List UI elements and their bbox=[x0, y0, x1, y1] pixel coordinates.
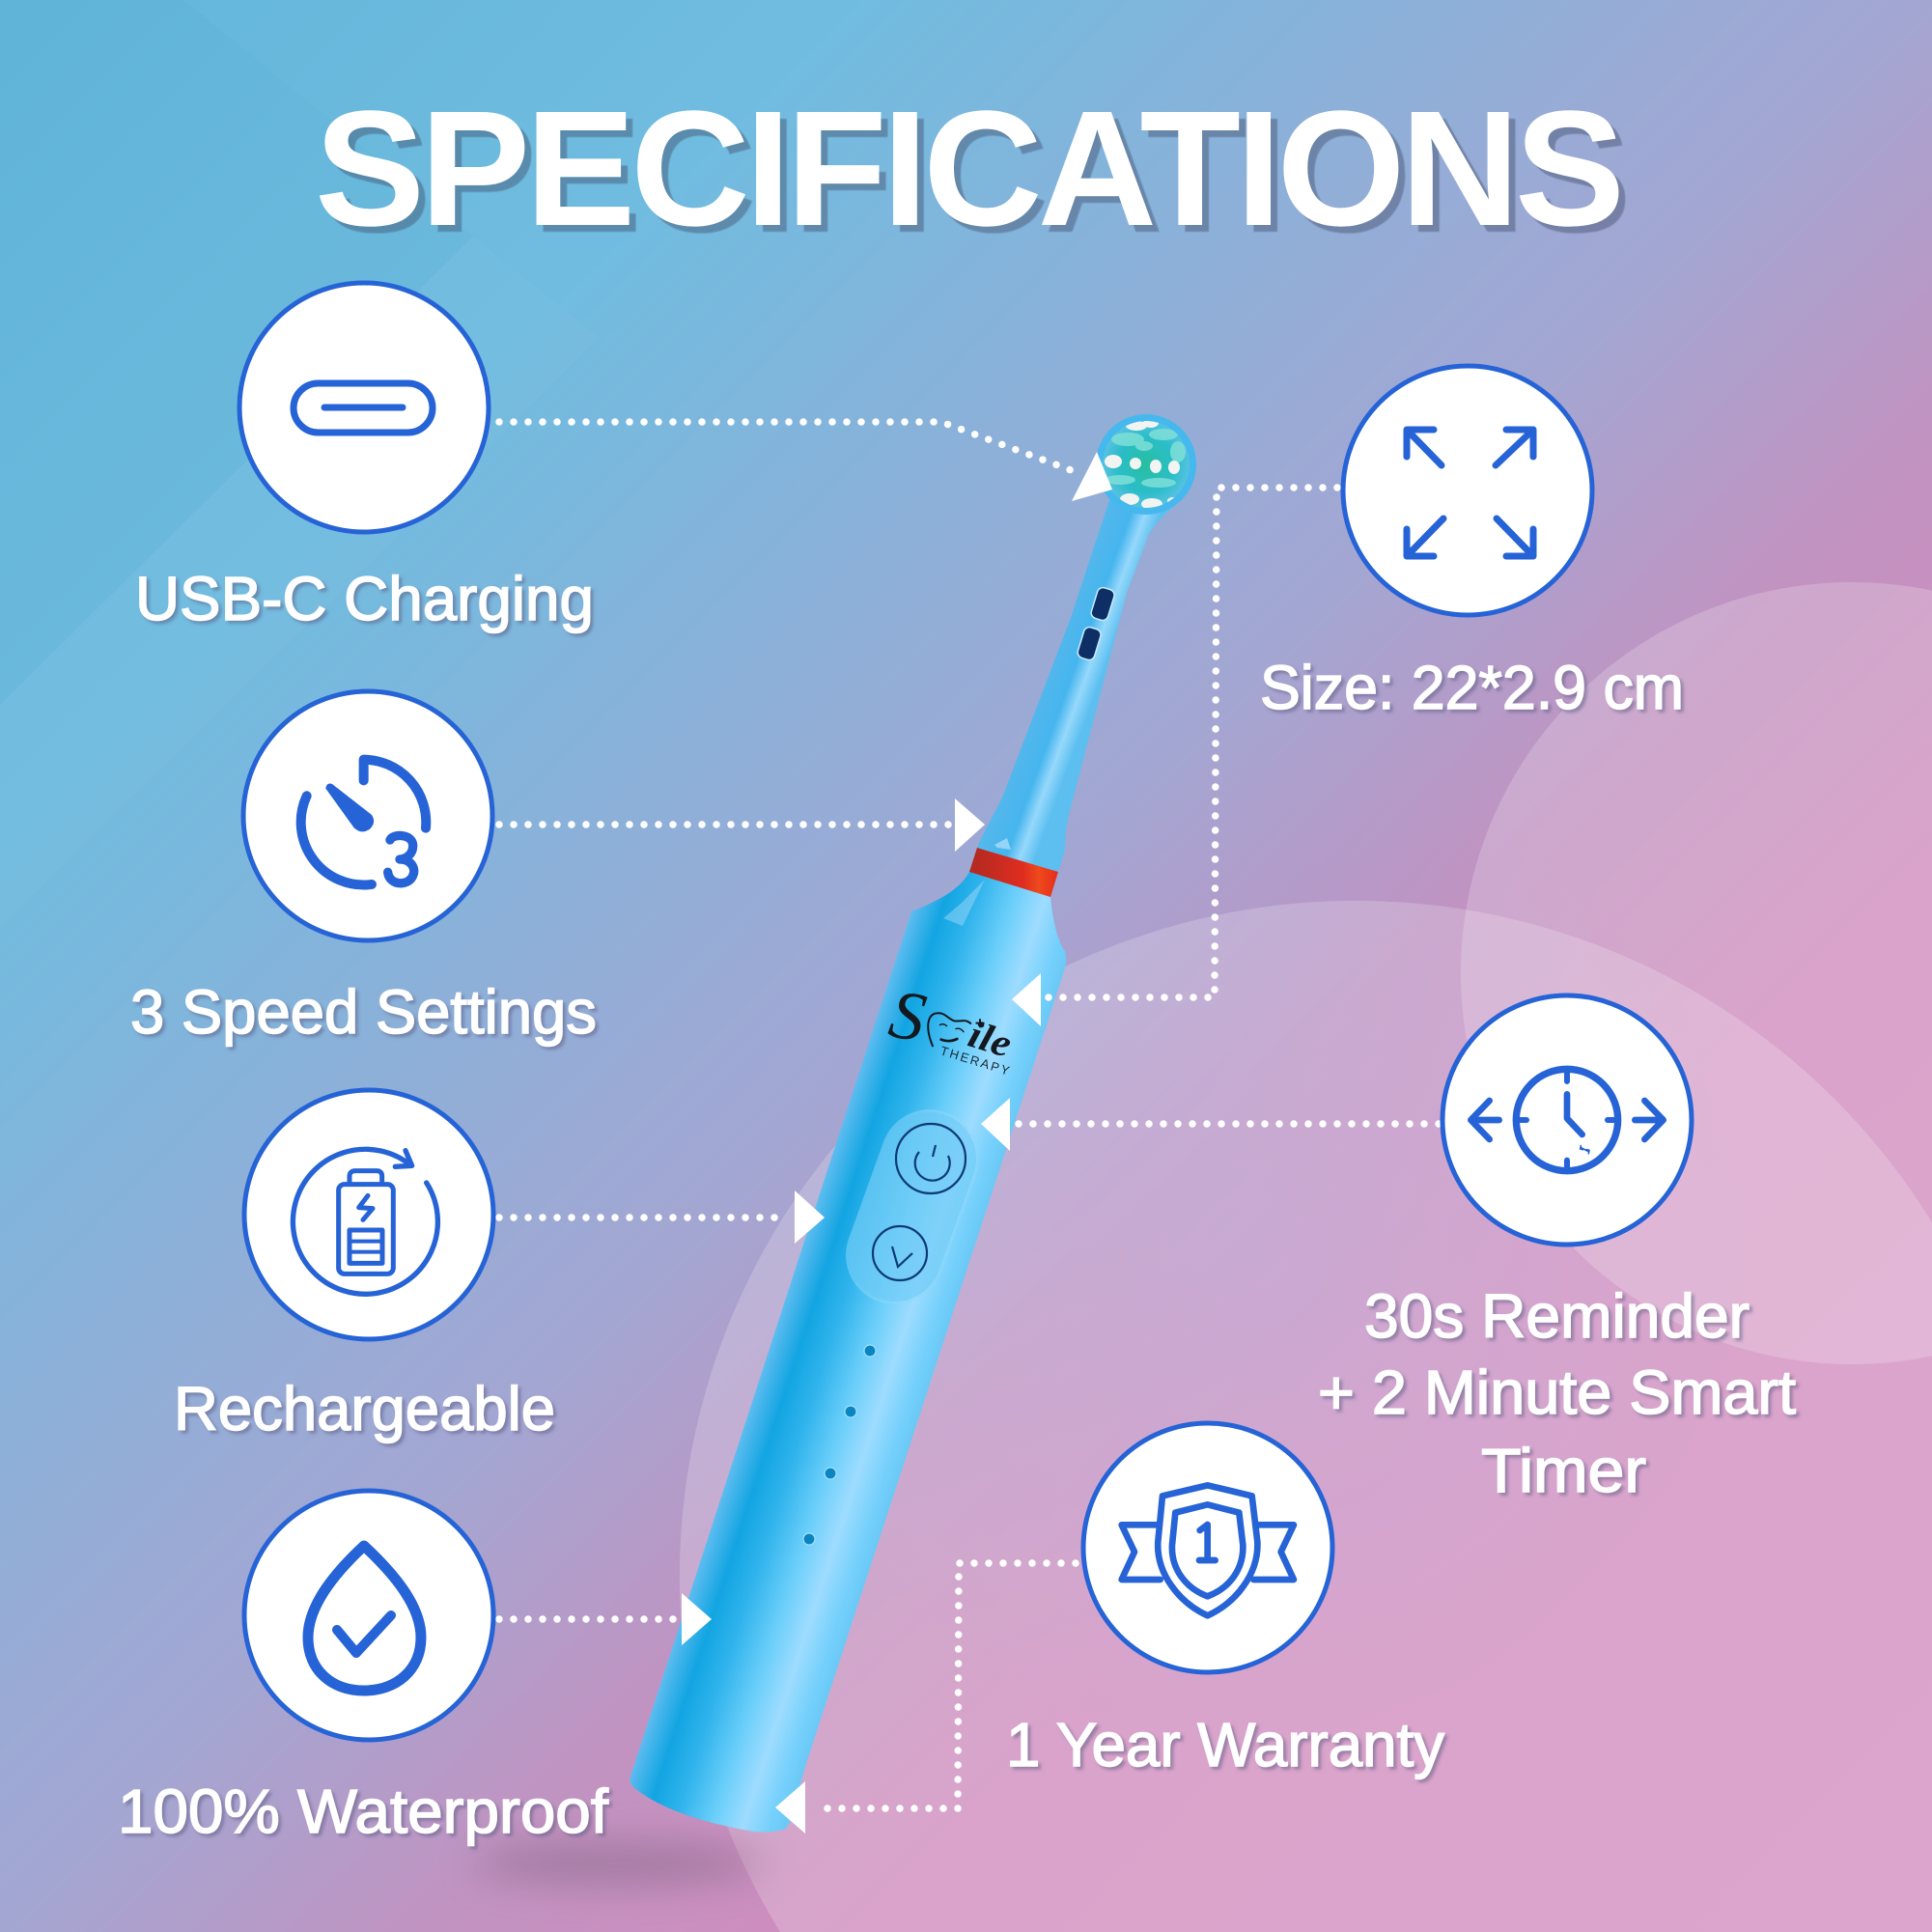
icon: USB-C port bbox=[239, 283, 489, 532]
label: Timer bbox=[1481, 1436, 1646, 1505]
feature: reminder timer bbox=[1318, 995, 1796, 1505]
feature: 3 speed settings bbox=[130, 691, 597, 1047]
icon: expand arrows bbox=[1343, 366, 1592, 615]
feature: rechargeable bbox=[174, 1090, 555, 1443]
feature: size bbox=[1260, 366, 1684, 722]
connector: rechargeable bbox=[499, 1190, 825, 1244]
label bbox=[1318, 1281, 1796, 1505]
feature: USB-C charging bbox=[135, 283, 594, 633]
toothbrush product bbox=[630, 414, 1196, 1833]
label: USB-C Charging bbox=[135, 564, 594, 633]
brush head bbox=[1096, 414, 1196, 515]
label: Size: 22*2.9 cm bbox=[1260, 653, 1684, 722]
neck slots bbox=[1077, 586, 1116, 661]
icon: shield badge bbox=[1083, 1423, 1332, 1672]
red collar band bbox=[969, 848, 1058, 897]
control panel capsule bbox=[895, 1159, 930, 1255]
connector: warranty bbox=[775, 1563, 1076, 1834]
neck bbox=[969, 497, 1173, 872]
connector: speed bbox=[499, 798, 985, 852]
handle body bbox=[630, 872, 1066, 1833]
power button bbox=[896, 1124, 966, 1193]
brand logo: ile bbox=[964, 1012, 1017, 1066]
label: 100% Waterproof bbox=[118, 1777, 608, 1846]
icon: battery with cycle arrow bbox=[244, 1090, 493, 1339]
feature: warranty bbox=[1006, 1423, 1444, 1779]
indicator dots bbox=[803, 1345, 876, 1545]
label: + 2 Minute Smart bbox=[1318, 1358, 1796, 1427]
label: 3 Speed Settings bbox=[130, 977, 597, 1047]
shoulder highlights bbox=[943, 880, 985, 926]
icon: water drop with check bbox=[244, 1491, 493, 1740]
toothbrush shadow bbox=[473, 1844, 763, 1883]
icon: speed dial 3 bbox=[243, 691, 492, 940]
brand logo: S bbox=[884, 974, 932, 1057]
label: 30s Reminder bbox=[1364, 1281, 1750, 1351]
brand logo bbox=[884, 974, 1017, 1078]
icon: clock with arrows bbox=[1442, 995, 1692, 1245]
connector: waterproof bbox=[499, 1593, 712, 1645]
label: 1 Year Warranty bbox=[1006, 1710, 1444, 1779]
mode button bbox=[873, 1226, 927, 1280]
connector: size bbox=[1012, 488, 1337, 1026]
title: SPECIFICATIONS bbox=[315, 77, 1620, 261]
connector: USB-C to head bbox=[499, 422, 1112, 501]
bristles bbox=[1103, 418, 1190, 510]
feature: waterproof bbox=[118, 1491, 608, 1846]
connector: reminder bbox=[981, 1098, 1439, 1151]
label: Rechargeable bbox=[174, 1374, 555, 1443]
brand logo: THERAPY bbox=[938, 1044, 1012, 1078]
